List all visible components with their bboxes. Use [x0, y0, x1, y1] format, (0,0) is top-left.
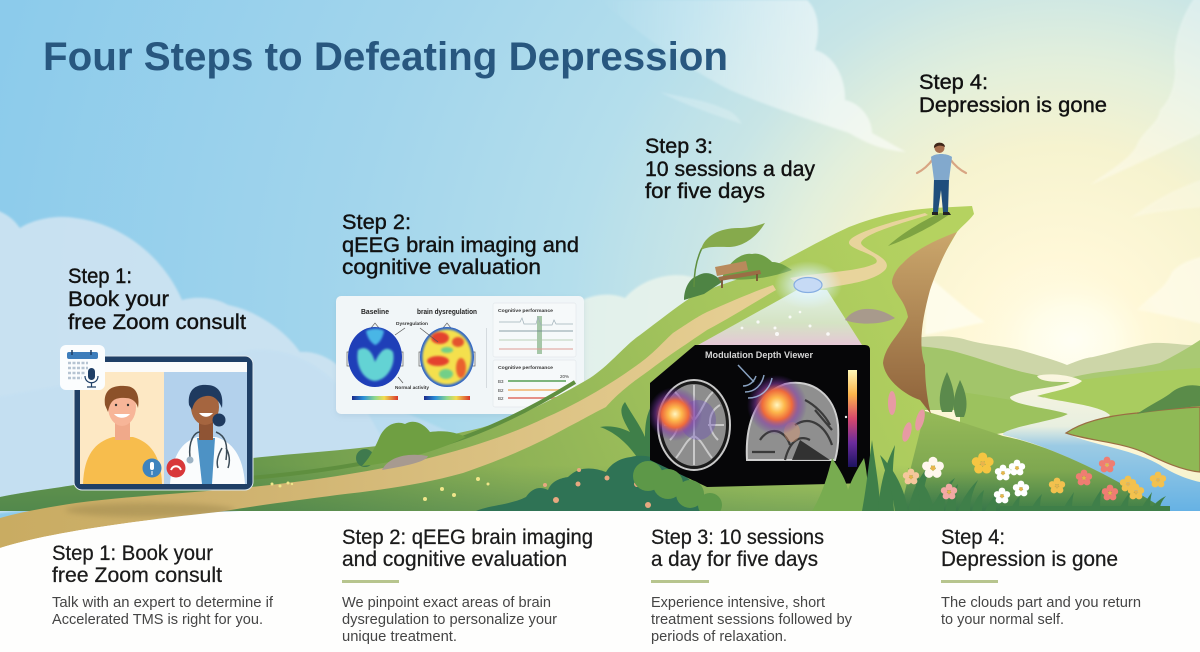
beam sparkles [741, 311, 830, 336]
yellow flower dots on hill [270, 477, 490, 501]
glowing treatment coil [774, 261, 842, 309]
step 3 callout [645, 134, 815, 203]
white caption panel [0, 511, 1200, 652]
right video pane [164, 372, 247, 484]
calendar icon [60, 345, 105, 390]
baseline head map [347, 323, 403, 387]
vertical divider [486, 328, 487, 388]
bank: lower right meadow [1066, 407, 1200, 472]
bush lower left [633, 461, 722, 517]
tree 1 [940, 372, 954, 412]
cognitive bars panel: B2 [498, 396, 504, 401]
heading: and cognitive evaluation [342, 548, 567, 571]
caption: step 4 [941, 526, 1141, 628]
sun [977, 265, 1167, 415]
hair [934, 143, 945, 148]
heading: Step 1: Book your [52, 542, 213, 565]
cloud: small wisp [660, 92, 742, 124]
cognitive bars panel: 20% [560, 374, 569, 379]
hill: right far [1047, 340, 1200, 420]
grass blades [862, 440, 1170, 511]
step 1 callout: free Zoom consult [68, 310, 246, 334]
body [52, 594, 274, 628]
rule [651, 580, 709, 583]
annotation leader lines [395, 328, 438, 383]
legs [933, 179, 949, 212]
background hills [915, 340, 1200, 440]
card shadow [336, 298, 584, 416]
tall leaf [701, 223, 765, 250]
EEG panel: Cognitive performance [498, 308, 554, 313]
hill base shading [0, 432, 1000, 511]
doctor [170, 385, 245, 484]
step 2 callout: Step 2: [342, 210, 411, 234]
step 2 callout: cognitive evaluation [342, 255, 541, 279]
caption: step 1 [52, 542, 274, 628]
sky background [0, 0, 1200, 520]
body [941, 594, 1141, 628]
broad leaves [600, 400, 668, 470]
panel title: Modulation Depth Viewer [705, 350, 813, 361]
hill: right meadow [1037, 368, 1200, 420]
cognitive bars panel: B3 [498, 379, 504, 384]
winding path: lower [0, 285, 776, 548]
step 4 callout: Step 4: [919, 70, 988, 94]
colour scale bar [848, 370, 857, 467]
body [651, 594, 852, 645]
body: Talk with an expert to determine if [52, 594, 274, 611]
foreground foliage over panel [633, 458, 870, 517]
heading: Step 2: qEEG brain imaging [342, 526, 593, 549]
shadow [888, 213, 950, 246]
cliff face [883, 232, 957, 414]
plant stem [694, 248, 702, 287]
step 1 callout: Step 1: [68, 264, 132, 288]
body: Experience intensive, short [651, 594, 826, 611]
body [342, 594, 557, 645]
path shadow under tablet [65, 503, 235, 517]
title: Four Steps to Defeating Depression [43, 35, 728, 79]
main hill [0, 206, 974, 511]
heading: a day for five days [651, 548, 818, 571]
rule [342, 580, 399, 583]
backrest [715, 261, 748, 276]
seat [718, 270, 761, 281]
top bar [80, 362, 247, 372]
bush flower dots [543, 468, 651, 508]
sagittal brain scan [747, 375, 838, 460]
heading [342, 526, 593, 571]
meadow flowers [903, 452, 1166, 503]
colour bar right [424, 396, 470, 400]
cloud: upper right [1090, 0, 1200, 185]
cloud: low band left [0, 349, 470, 515]
arms [917, 159, 966, 173]
hill: left meadow [960, 392, 1068, 440]
rule [941, 580, 998, 583]
qEEG card [336, 296, 584, 416]
cloud: right lower [1137, 252, 1200, 330]
dysregulated head map [419, 323, 475, 387]
heading [651, 526, 824, 571]
right river bank [1066, 385, 1200, 472]
caption: step 3 [651, 526, 852, 645]
bush with peach flowers [476, 456, 720, 511]
step 3 callout: 10 sessions a day [645, 157, 815, 181]
cloud: cream near cliff [925, 275, 985, 335]
winding path: upper [790, 213, 928, 292]
body: The clouds part and you return [941, 594, 1141, 611]
bench [715, 261, 761, 288]
tablet frame [74, 356, 253, 490]
step 4 callout: Depression is gone [919, 93, 1107, 117]
cloud: upper centre [600, 0, 906, 152]
end call button [166, 458, 186, 478]
river [1003, 374, 1200, 511]
rock on hill right [845, 309, 895, 324]
step 4 callout [919, 70, 1107, 117]
cloud: behind hill [560, 275, 720, 390]
glow [774, 261, 842, 309]
body: dysregulation to personalize your [342, 611, 557, 628]
annotation: normal activity: Normal activity [395, 385, 430, 390]
baseline label: Baseline [361, 307, 389, 316]
heading: Depression is gone [941, 548, 1118, 571]
bush with rock near step 2 [356, 422, 466, 470]
body: periods of relaxation. [651, 628, 787, 645]
bush [362, 422, 466, 466]
cognitive bars panel: B2 [498, 388, 504, 393]
cloud: large left [0, 205, 400, 515]
heading: Step 4: [941, 526, 1005, 549]
body: to your normal self. [941, 611, 1064, 628]
head [934, 143, 944, 153]
low bush left of bench [684, 273, 722, 300]
heading: free Zoom consult [52, 564, 222, 587]
step 1 callout: Book your [68, 287, 169, 311]
EEG panel [493, 303, 576, 357]
bush and plant at bench [684, 223, 792, 300]
body: Accelerated TMS is right for you. [52, 611, 263, 628]
left video pane [80, 372, 164, 484]
foxglove flowers [888, 391, 927, 443]
distant mountains [915, 336, 1200, 400]
bank: distant bush [1137, 385, 1200, 414]
disc [794, 278, 822, 292]
Zoom consult tablet [60, 345, 253, 490]
low bush right of bench [722, 254, 792, 280]
light beam [698, 290, 862, 345]
heading: Step 3: 10 sessions [651, 526, 824, 549]
hill: left far [915, 346, 1075, 410]
panel background [650, 345, 870, 487]
trees [940, 372, 967, 417]
heading [52, 542, 222, 587]
axial brain scan [648, 380, 730, 470]
card background [336, 296, 584, 414]
step 3 callout: Step 3: [645, 134, 713, 158]
step 1 callout [68, 264, 246, 334]
body: We pinpoint exact areas of brain [342, 594, 551, 611]
step 2 callout: qEEG brain imaging and [342, 233, 579, 257]
mic button [142, 458, 162, 478]
cognitive bars panel [493, 360, 576, 407]
step 2 callout [342, 210, 579, 279]
caption: step 2 [342, 526, 593, 645]
scale marker [845, 416, 847, 418]
legs [722, 274, 757, 288]
annotation: dysregulation: Dysregulation [396, 321, 428, 326]
colour bar left [352, 396, 398, 400]
shirt [931, 154, 952, 180]
shoes [932, 212, 951, 215]
path edge shadow [250, 382, 575, 478]
clouds [0, 0, 1200, 515]
step 3 callout: for five days [645, 179, 765, 203]
bright leaf [812, 458, 870, 511]
body: unique treatment. [342, 628, 457, 645]
coil pulse waves [738, 365, 772, 398]
tree 2 [954, 380, 967, 417]
dark bush lobe [356, 449, 374, 467]
foliage left of viewer [476, 400, 720, 511]
heading [941, 526, 1118, 571]
man with open arms [888, 143, 966, 246]
patient [83, 386, 162, 484]
dysregulation label: brain dysregulation [417, 307, 477, 316]
cognitive bars panel: Cognitive performance [498, 365, 554, 370]
body: treatment sessions followed by [651, 611, 852, 628]
cloud: right wisp [1130, 172, 1200, 218]
rock [382, 455, 428, 470]
MRI panel: Modulation Depth Viewer [648, 345, 870, 487]
foreground meadow [860, 411, 1168, 511]
